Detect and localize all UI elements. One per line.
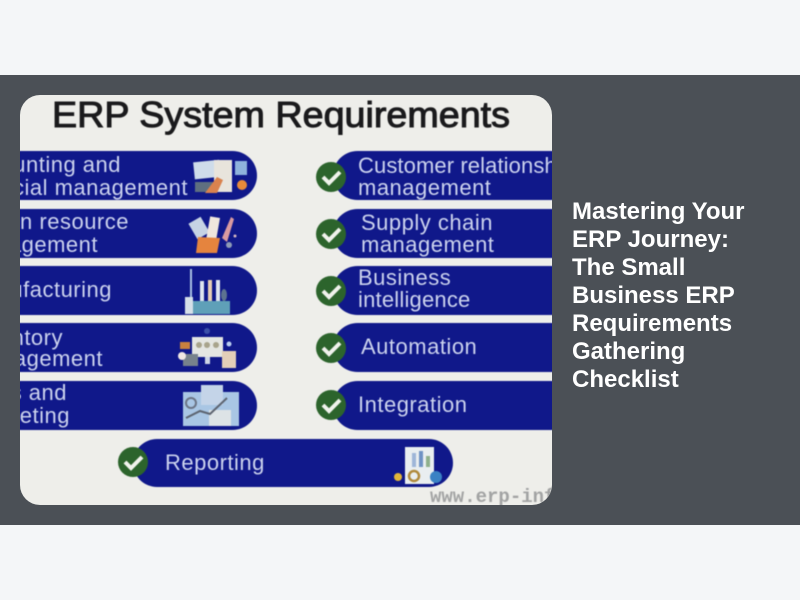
item: business intelligence: Business (358, 265, 451, 290)
headline: Gathering (572, 338, 685, 365)
icon: HR people tools (188, 216, 236, 253)
chart title: ERP System Requirements (52, 95, 510, 135)
icon: check (316, 162, 346, 192)
headline: The Small (572, 254, 685, 281)
dark content band (0, 75, 800, 525)
item: business intelligence: intelligence (358, 287, 470, 312)
item: integration (316, 381, 633, 430)
icon: marketing chart (183, 385, 239, 426)
icon: finance documents (193, 160, 247, 193)
item: integration: Integration (358, 392, 467, 417)
headline: Checklist (572, 366, 679, 393)
headline: Requirements (572, 310, 732, 337)
icon: check (118, 447, 148, 477)
item: reporting: Reporting (165, 450, 265, 475)
icon: check (316, 219, 346, 249)
item: accounting and financial management (0, 151, 257, 200)
item: automation (316, 323, 633, 372)
item: customer relationship management (316, 151, 633, 200)
item: customer relationship management: management (358, 175, 491, 200)
icon: clipboard report (394, 447, 442, 484)
item: business intelligence (316, 265, 633, 315)
headline: Business ERP (572, 282, 735, 309)
icon: inventory monitor (178, 328, 236, 368)
headline: ERP Journey: (572, 226, 729, 253)
icon: check (316, 333, 346, 363)
item: inventory management (0, 323, 257, 372)
item: sales and marketing (0, 380, 257, 430)
item: supply chain management: Supply chain (361, 210, 493, 235)
icon: check (316, 390, 346, 420)
item: supply chain management (316, 209, 633, 258)
icon: check (316, 276, 346, 306)
headline: Mastering Your (572, 198, 744, 225)
panel: ERP system requirements image (20, 95, 552, 505)
item: supply chain management: management (361, 232, 494, 257)
item: automation: Automation (361, 334, 477, 359)
item: manufacturing (0, 266, 257, 315)
item: human resource management (0, 209, 257, 258)
item: reporting (118, 439, 453, 487)
headline (572, 198, 744, 393)
icon: factory (185, 269, 230, 314)
